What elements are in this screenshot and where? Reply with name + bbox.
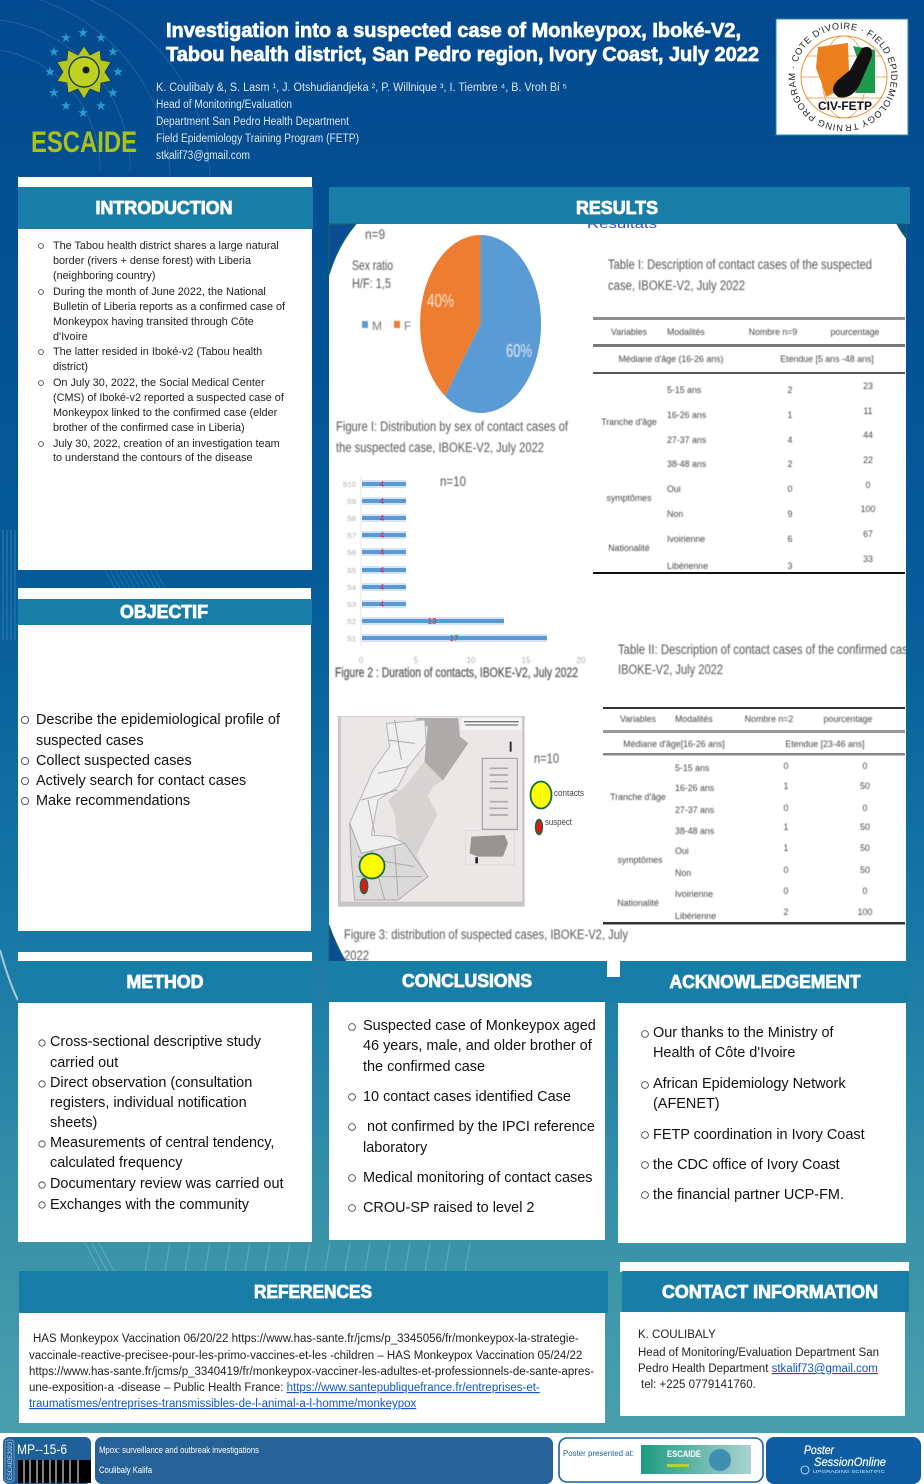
text block: objectives: suspected cases: [36, 733, 144, 749]
table 2: 0: [863, 761, 868, 771]
table 1: 33: [863, 554, 873, 564]
chart: pie of contacts by sex: H/F: 1,5: [352, 275, 391, 291]
chart: duration of contacts: 4: [380, 566, 385, 575]
table 2: 0: [863, 803, 868, 813]
table 2: Libérienne: [675, 911, 716, 921]
table 2: 0: [784, 865, 789, 875]
footer: poster presented at: Poster presented at:: [563, 1449, 634, 1458]
title: Investigation into a suspected case of Monkeypox, Iboké-V2,: [166, 20, 741, 42]
table 2: Ivoirienne: [675, 889, 713, 899]
table 2: 0: [863, 886, 868, 896]
table 1: 44: [863, 430, 873, 440]
table 1: Nationalité: [608, 543, 650, 553]
panel: contact information: [620, 1262, 909, 1416]
footer: poster session online: Poster: [804, 1443, 835, 1457]
legend: map: suspect: [545, 817, 572, 827]
table 1: Oui: [667, 484, 681, 494]
caption: table 2: IBOKE-V2, July 2022: [618, 662, 723, 677]
chart: duration of contacts: 4: [380, 583, 385, 592]
text block: references: HAS Monkeypox Vaccination 06/20/22 https://www.has-sante.fr/jcms/p_3345056/fr/monkeypox-la-strategie-: [33, 1333, 579, 1345]
authors and affiliation: K. Coulibaly &, S. Lasm ¹, J. Otshudiandjeka ², P. Willnique ³, I. Tiembre ⁴, B. Vroh Bi ⁵: [156, 82, 567, 94]
panel: results: [329, 187, 914, 963]
chart: pie of contacts by sex: 60%: [506, 341, 532, 361]
text block: introduction bullets: Monkeypox linked to the confirmed case (elder: [53, 407, 278, 419]
chart: duration of contacts: S7: [347, 531, 356, 540]
text block: conclusions bullets: not confirmed by the IPCI reference: [367, 1119, 595, 1135]
table 1: 16-26 ans: [667, 410, 707, 420]
text block: introduction bullets: to understand the contours of the disease: [53, 452, 253, 464]
table 1: Tranche d'âge: [601, 417, 657, 427]
table 1: 1: [788, 410, 793, 420]
text block: introduction bullets: [39, 240, 286, 464]
text block: introduction bullets: district): [53, 361, 88, 373]
chart: duration of contacts: 13: [428, 617, 437, 626]
text block: objectives: Collect suspected cases: [36, 753, 192, 769]
footer: session: [95, 1437, 553, 1484]
chart: duration of contacts: 15: [522, 656, 531, 665]
chart: duration of contacts: 4: [380, 480, 385, 489]
logo: ESCAIDE: ★: [107, 85, 119, 100]
text block: contact details: Head of Monitoring/Evaluation Department San: [638, 1347, 879, 1359]
table 2: 2: [784, 907, 789, 917]
logo: ESCAIDE: ★: [107, 44, 119, 59]
table 2: Nombre n=2: [745, 714, 793, 724]
table 1: Etendue [5 ans -48 ans]: [780, 354, 874, 364]
text block: conclusions bullets: Medical monitoring of contact cases: [363, 1170, 593, 1186]
caption: table 1: [608, 257, 872, 293]
table 2: 50: [860, 865, 870, 875]
table 2: 50: [860, 781, 870, 791]
caption: figure 3: [344, 927, 628, 963]
text block: introduction bullets: On July 30, 2022, the Social Medical Center: [53, 377, 265, 389]
heading: references: REFERENCES: [254, 1282, 372, 1302]
legend: map: [530, 750, 584, 834]
chart: pie of contacts by sex: [352, 226, 541, 413]
table 1: 5-15 ans: [667, 385, 702, 395]
logo: ESCAIDE: ★: [112, 64, 124, 79]
panel: results: Résultats: [587, 216, 658, 231]
map marker: suspect: [360, 878, 368, 894]
text block: acknowledgement bullets: FETP coordination in Ivory Coast: [653, 1127, 865, 1143]
logo: ESCAIDE: [31, 25, 137, 159]
table 2: Oui: [675, 846, 689, 856]
table 1: Nombre n=9: [749, 327, 797, 337]
text block: acknowledgement bullets: Our thanks to the Ministry of: [653, 1025, 835, 1041]
text block: introduction bullets: border (rivers + dense forest) with Liberia: [53, 255, 252, 267]
caption: figure 3: 2022: [344, 948, 369, 963]
text block: method bullets: Exchanges with the community: [50, 1197, 250, 1213]
chart: duration of contacts: n=10: [440, 473, 466, 489]
table 2: Médiane d'âge[16-26 ans]: [623, 739, 725, 749]
legend: map: n=10: [534, 750, 559, 766]
logo: CIV-FETP: [776, 18, 908, 136]
logo: ESCAIDE: ★: [44, 64, 56, 79]
table 2: 38-48 ans: [675, 826, 715, 836]
table 2: Tranche d'âge: [610, 792, 666, 802]
text block: introduction bullets: The Tabou health district shares a large natural: [53, 240, 279, 252]
text block: method bullets: Direct observation (consultation: [50, 1075, 252, 1091]
chart: duration of contacts: S5: [347, 566, 356, 575]
table 1: 0: [788, 484, 793, 494]
footer: poster session online: UPGRADING SCIENTIFIC: [813, 1469, 886, 1474]
text block: objectives: Make recommendations: [36, 793, 190, 809]
table 2: Non: [675, 868, 691, 878]
chart: pie of contacts by sex: F: [404, 319, 411, 333]
text block: acknowledgement bullets: the financial partner UCP-FM.: [653, 1187, 844, 1203]
chart: duration of contacts: S2: [347, 617, 356, 626]
table 1: symptômes: [607, 493, 652, 503]
text block: method bullets: Documentary review was carried out: [50, 1176, 284, 1192]
caption: table 2: [618, 642, 914, 678]
table 2: Nationalité: [617, 898, 659, 908]
footer: poster id: MP--15-6: [17, 1441, 67, 1457]
chart: duration of contacts: 4: [380, 531, 385, 540]
table 2: [603, 707, 905, 924]
table 1: pourcentage: [831, 327, 880, 337]
panel: method: [18, 952, 313, 1242]
text block: method bullets: carried out: [50, 1055, 118, 1071]
table 2: 27-37 ans: [675, 805, 715, 815]
text block: acknowledgement bullets: the CDC office of Ivory Coast: [653, 1157, 840, 1173]
chart: duration of contacts: S3: [347, 600, 356, 609]
text block: objectives: [21, 712, 281, 809]
table 2: pourcentage: [824, 714, 873, 724]
panel: conclusions: [329, 961, 623, 1240]
table 1: 100: [861, 504, 875, 514]
table 2: Etendue [23-46 ans]: [785, 739, 865, 749]
text block: conclusions bullets: CROU-SP raised to level 2: [363, 1200, 534, 1216]
table 1: 67: [863, 529, 873, 539]
title: Tabou health district, San Pedro region, Ivory Coast, July 2022: [166, 44, 759, 66]
chart: duration of contacts: 4: [380, 600, 385, 609]
caption: figure 2: Figure 2 : Duration of contacts, IBOKE-V2, July 2022: [335, 665, 578, 680]
text block: references: [29, 1333, 594, 1410]
table 1: 38-48 ans: [667, 459, 707, 469]
chart: duration of contacts: 4: [380, 514, 385, 523]
chart: duration of contacts: 17: [450, 634, 459, 643]
text block: method bullets: Cross-sectional descriptive study: [50, 1034, 262, 1050]
text block: references: traumatismes/entreprises-transmissibles-de-l-animal-a-l-homme/monkeypox: [29, 1398, 417, 1410]
authors and affiliation: Head of Monitoring/Evaluation: [156, 99, 292, 111]
footer: poster id: [3, 1437, 91, 1484]
logo: ESCAIDE: ★: [95, 98, 107, 113]
table 1: 6: [788, 534, 793, 544]
table 2: 1: [784, 843, 789, 853]
panel: references: [19, 1271, 608, 1423]
text block: method bullets: calculated frequency: [50, 1155, 183, 1171]
text block: conclusions bullets: 46 years, male, and older brother of: [363, 1038, 593, 1054]
table 1: 11: [863, 406, 873, 416]
caption: figure 1: Figure I: Distribution by sex of contact cases of: [336, 419, 568, 434]
footer: poster id: ESCAIDE2023: [7, 1442, 14, 1480]
text block: method bullets: sheets): [50, 1115, 97, 1131]
chart: duration of contacts: 0: [359, 656, 364, 665]
text block: introduction bullets: The latter resided in Iboké-v2 (Tabou health: [53, 346, 262, 358]
authors and affiliation: [156, 82, 567, 162]
table 1: [593, 317, 905, 574]
chart: duration of contacts: 5: [414, 656, 419, 665]
chart: duration of contacts: S8: [347, 514, 356, 523]
table 1: 9: [788, 509, 793, 519]
text block: references: vaccinale-reactive-precisee-pour-les-primo-vaccines-et-les -children – HAS Monkeypox Vaccination 05/24/22: [29, 1350, 582, 1362]
text block: acknowledgement bullets: African Epidemiology Network: [653, 1076, 846, 1092]
table 1: Ivoirienne: [667, 534, 705, 544]
caption: table 1: Table I: Description of contact cases of the suspected: [608, 257, 872, 272]
text block: contact details: Pedro Health Department stkalif73@gmail.com: [638, 1363, 878, 1375]
text block: conclusions bullets: laboratory: [363, 1140, 428, 1156]
logo: ESCAIDE: ESCAIDE: [31, 126, 137, 159]
table 2: 50: [860, 822, 870, 832]
logo: ESCAIDE: ★: [60, 30, 72, 45]
table 2: symptômes: [618, 855, 663, 865]
table 1: Médiane d'âge (16-26 ans): [619, 354, 723, 364]
chart: duration of contacts: 20: [577, 656, 586, 665]
heading: introduction: INTRODUCTION: [96, 198, 232, 218]
text block: introduction bullets: (neighboring country): [53, 270, 155, 282]
logo: ESCAIDE: ★: [77, 25, 89, 40]
footer: session: Mpox: surveillance and outbreak investigations: [99, 1445, 259, 1455]
heading: acknowledgement: ACKNOWLEDGEMENT: [670, 972, 860, 992]
authors and affiliation: Department San Pedro Health Department: [156, 116, 350, 128]
heading: objectif: OBJECTIF: [120, 602, 208, 622]
text block: introduction bullets: (CMS) of Iboké-v2 reported a suspected case of: [53, 392, 285, 404]
table 1: 0: [866, 480, 871, 490]
chart: duration of contacts: 10: [467, 656, 476, 665]
caption: table 1: case, IBOKE-V2, July 2022: [608, 278, 745, 293]
heading: contact information: CONTACT INFORMATION: [662, 1282, 878, 1302]
text block: acknowledgement bullets: (AFENET): [653, 1096, 720, 1112]
map: distribution of suspected cases: [338, 716, 525, 907]
table 1: Variables: [611, 327, 648, 337]
text block: acknowledgement bullets: Health of Côte d'Ivoire: [653, 1045, 795, 1061]
heading: conclusions: CONCLUSIONS: [402, 971, 532, 991]
chart: duration of contacts: S4: [347, 583, 356, 592]
heading: results: RESULTS: [576, 198, 658, 218]
table 1: Libérienne: [667, 561, 708, 571]
text block: method bullets: registers, individual notification: [50, 1095, 247, 1111]
table 1: 27-37 ans: [667, 435, 707, 445]
footer: [0, 1433, 924, 1484]
text block: conclusions bullets: [349, 1018, 596, 1216]
text block: introduction bullets: brother of the confirmed case in Liberia): [53, 422, 245, 434]
authors and affiliation: Field Epidemiology Training Program (FETP): [156, 133, 359, 145]
chart: duration of contacts: 4: [380, 497, 385, 506]
table 2: 16-26 ans: [675, 783, 715, 793]
table 1: 23: [863, 381, 873, 391]
text block: introduction bullets: d'Ivoire: [53, 331, 88, 343]
caption: figure 1: [336, 419, 568, 455]
table 2: 1: [784, 781, 789, 791]
table 2: 100: [858, 907, 872, 917]
table 2: Modalités: [675, 714, 713, 724]
legend: map: contacts: [554, 788, 584, 798]
table 2: 50: [860, 843, 870, 853]
chart: duration of contacts: S1: [347, 634, 356, 643]
text block: conclusions bullets: the confirmed case: [363, 1059, 485, 1075]
authors and affiliation: stkalif73@gmail.com: [156, 150, 250, 162]
panel: objectif: [18, 588, 312, 931]
chart: duration of contacts: S10: [343, 480, 356, 489]
chart: pie of contacts by sex: M: [372, 319, 382, 333]
logo: ESCAIDE: ★: [48, 85, 60, 100]
logo: CIV-FETP: CIV-FETP: [818, 99, 872, 113]
table 2: 5-15 ans: [675, 763, 710, 773]
text block: objectives: Actively search for contact cases: [36, 773, 246, 789]
text block: introduction bullets: Bulletin of Liberia reports as a confirmed case of: [53, 301, 286, 313]
text block: contact details: tel: +225 0779141760.: [641, 1379, 756, 1391]
text block: method bullets: [39, 1034, 283, 1213]
logo: ESCAIDE: ★: [95, 30, 107, 45]
text block: contact details: K. COULIBALY: [638, 1329, 716, 1341]
chart: duration of contacts: 4: [380, 548, 385, 557]
map marker: contacts: [360, 854, 384, 878]
footer: poster presented at: ESCAIDE: [667, 1449, 701, 1460]
table 1: Non: [667, 509, 683, 519]
table 2: 1: [784, 822, 789, 832]
logo: ESCAIDE: ★: [48, 44, 60, 59]
panel: introduction: [18, 177, 313, 570]
table 2: 0: [784, 803, 789, 813]
footer: poster session online: SessionOnline: [814, 1455, 886, 1469]
logo: ESCAIDE: ★: [60, 98, 72, 113]
table 2: 0: [784, 761, 789, 771]
text block: references: https://www.has-sante.fr/jcms/p_3340419/fr/monkeypox-vacciner-les-adultes-et-professionnels-de-sante-apres-: [29, 1366, 594, 1378]
text block: method bullets: Measurements of central tendency,: [50, 1135, 274, 1151]
text block: objectives: Describe the epidemiological profile of: [36, 712, 281, 728]
chart: pie of contacts by sex: Sex ratio: [352, 257, 393, 273]
title: [166, 20, 759, 66]
text block: references: une-exposition-a -disease – Public Health France: https://www.santepubliquefrance.fr/entreprises-et-: [29, 1382, 540, 1394]
text block: conclusions bullets: 10 contact cases identified Case: [363, 1089, 571, 1105]
text block: contact details: [638, 1329, 879, 1391]
heading: method: METHOD: [126, 972, 204, 992]
table 1: 22: [863, 455, 873, 465]
table 1: 2: [788, 459, 793, 469]
panel: acknowledgement: [618, 961, 909, 1243]
text block: acknowledgement bullets: [642, 1025, 865, 1203]
text block: introduction bullets: July 30, 2022, creation of an investigation team: [53, 438, 280, 450]
caption: figure 3: Figure 3: distribution of suspected cases, IBOKE-V2, July: [344, 927, 628, 942]
chart: duration of contacts: [343, 473, 586, 665]
text block: introduction bullets: Monkeypox having transited through Côte: [53, 316, 254, 328]
chart: pie of contacts by sex: n=9: [365, 226, 385, 242]
footer: poster session online: [766, 1437, 921, 1484]
text block: conclusions bullets: Suspected case of Monkeypox aged: [363, 1018, 596, 1034]
table 2: 0: [784, 886, 789, 896]
table 1: 4: [788, 435, 793, 445]
caption: figure 1: the suspected case, IBOKE-V2, July 2022: [336, 440, 544, 455]
footer: session: Coulibaly Kalifa: [99, 1465, 152, 1475]
text block: introduction bullets: During the month of June 2022, the National: [53, 286, 266, 298]
chart: pie of contacts by sex: 40%: [427, 291, 454, 311]
table 2: Variables: [620, 714, 657, 724]
logo: ESCAIDE: ★: [77, 105, 89, 120]
table 1: Modalités: [667, 327, 705, 337]
chart: duration of contacts: S6: [347, 548, 356, 557]
table 1: 2: [788, 385, 793, 395]
table 1: 3: [788, 561, 793, 571]
footer: poster presented at: [559, 1438, 763, 1482]
chart: duration of contacts: S9: [347, 497, 356, 506]
